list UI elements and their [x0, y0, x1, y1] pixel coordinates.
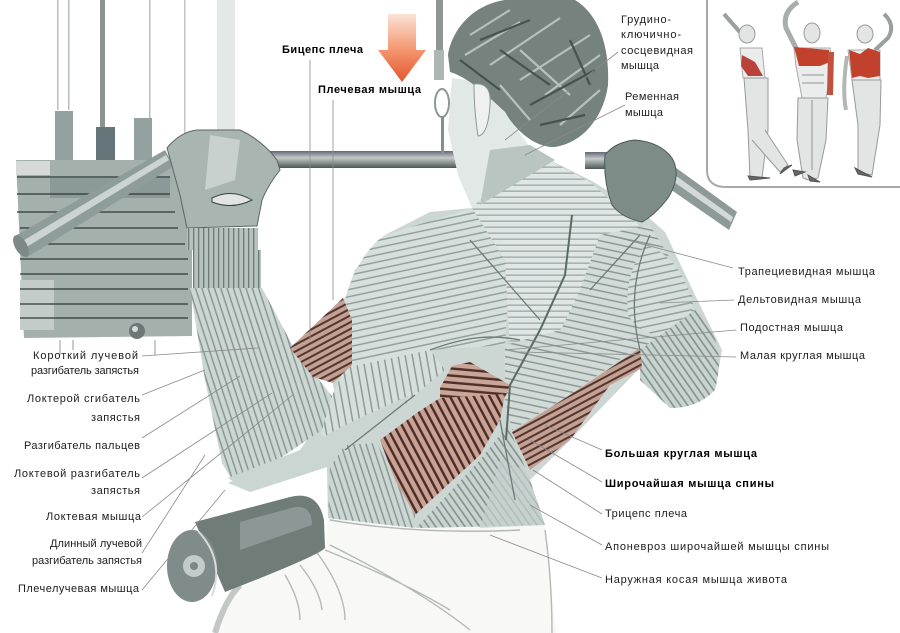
- inset: muscle location figures: [707, 0, 900, 187]
- face and neck: [448, 78, 532, 208]
- figure right: [844, 14, 891, 177]
- labels: top centre: Плечевая мышца: [318, 84, 422, 96]
- labels: left: Длинный лучевой: [50, 538, 142, 550]
- knit sleeve: [193, 250, 261, 288]
- arrow: pull direction: [378, 14, 426, 82]
- elbow band: [228, 395, 410, 492]
- left bar handle: [10, 150, 174, 259]
- labels: upper right: мышца: [625, 107, 664, 119]
- weight stack: [16, 160, 192, 355]
- right shoulder: [550, 225, 695, 352]
- labels: upper right: Ременная: [625, 91, 679, 103]
- labels: left: Короткий лучевой: [33, 350, 138, 362]
- labels: left: Плечелучевая мышца: [18, 583, 140, 595]
- cable and chain: [434, 0, 449, 154]
- labels: right: Апоневроз широчайшей мышцы спины: [605, 541, 829, 553]
- red lat: latissimus: [380, 394, 505, 515]
- labels: right: Малая круглая мышца: [740, 350, 866, 362]
- labels: right: [605, 266, 876, 586]
- labels: right: Трицепс плеча: [605, 508, 688, 520]
- triceps upper arm: [320, 350, 445, 440]
- labels: left: Локтерой сгибатель: [27, 393, 140, 405]
- ear: [474, 84, 490, 136]
- leg and trousers: [215, 518, 556, 633]
- labels: upper right: мышца: [621, 60, 660, 72]
- right arm: [640, 310, 719, 408]
- labels: right: Наружная косая мышца живота: [605, 574, 788, 586]
- knee pad roller: [167, 496, 325, 602]
- lower back left: [328, 443, 415, 528]
- labels: left: разгибатель запястья: [31, 365, 139, 377]
- labels: left: Локтевая мышца: [46, 511, 142, 523]
- forearm: [190, 288, 332, 480]
- right hand: [605, 140, 676, 222]
- labels: right: Трапециевидная мышца: [738, 266, 876, 278]
- wrist cuff: [187, 228, 258, 250]
- body base: [228, 150, 722, 528]
- labels: right: Подостная мышца: [740, 322, 844, 334]
- red lat: right side: [512, 348, 642, 470]
- labels: right: Дельтовидная мышца: [738, 294, 862, 306]
- labels: left: Локтевой разгибатель: [14, 468, 140, 480]
- weight machine: [10, 0, 235, 355]
- left hand and cuff: [167, 130, 280, 288]
- head: [448, 0, 608, 208]
- figure back musculature: [190, 150, 722, 528]
- labels: top centre: [282, 44, 422, 96]
- figure left: [724, 14, 792, 180]
- aponeurosis: [416, 425, 545, 528]
- fist: [167, 130, 280, 228]
- labels: upper right: ключично-: [621, 29, 681, 41]
- spine line: [506, 215, 572, 440]
- deltoid: [627, 245, 691, 335]
- labels: left: [14, 350, 142, 595]
- labels: upper right: Грудино-: [621, 14, 671, 26]
- mid back: [505, 330, 640, 430]
- back shoulder: [345, 208, 510, 368]
- labels: right: Большая круглая мышца: [605, 448, 758, 460]
- labels: right: Широчайшая мышца спины: [605, 478, 774, 490]
- labels: left: запястья: [91, 412, 140, 424]
- labels: top centre: Бицепс плеча: [282, 44, 364, 56]
- trapezius: [472, 150, 650, 350]
- red muscle: under arm: [290, 298, 352, 383]
- figure centre: [785, 2, 834, 182]
- leader lines: [142, 52, 736, 590]
- red lat: teres major top: [440, 362, 510, 402]
- lat pulldown bar: [270, 151, 737, 230]
- labels: upper right: сосцевидная: [621, 45, 693, 57]
- labels: upper right: [621, 14, 693, 119]
- guide rods: [55, 0, 235, 161]
- hair: [448, 0, 608, 147]
- labels: left: разгибатель запястья: [32, 555, 142, 567]
- labels: left: Разгибатель пальцев: [24, 440, 140, 452]
- labels: left: запястья: [91, 485, 140, 497]
- inset frame: [707, 0, 900, 187]
